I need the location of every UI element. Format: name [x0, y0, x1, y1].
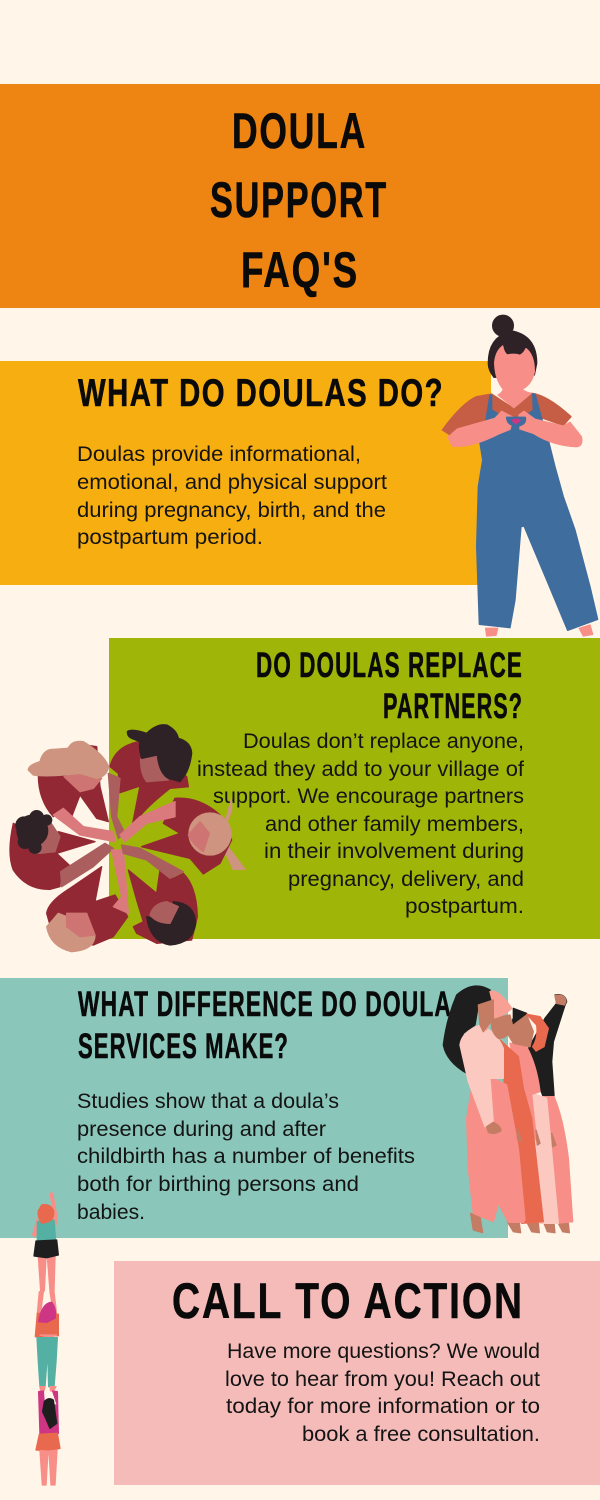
text block: what difference do doula services make: childbirth has a number of benefits — [77, 1145, 415, 1168]
text block: do doulas replace partners: instead they add to your village of — [197, 758, 524, 781]
text block: do doulas replace partners: and other family members, — [265, 813, 524, 836]
panel: what difference do doula services make — [0, 978, 508, 1238]
text block: do doulas replace partners: in their involvement during — [264, 840, 524, 863]
icon: woman in overalls making heart hands — [442, 315, 598, 636]
text block: do doulas replace partners: pregnancy, delivery, and — [288, 868, 524, 891]
text block: do doulas replace partners: Doulas don’t replace anyone, — [243, 730, 524, 753]
text block: what difference do doula services make: presence during and after — [77, 1118, 326, 1141]
title — [210, 103, 388, 298]
heading: what difference do doula services make — [78, 985, 452, 1066]
text block: what difference do doula services make — [77, 1090, 415, 1224]
heading: what difference do doula services make: SERVICES MAKE? — [78, 1027, 289, 1066]
title: FAQ'S — [241, 242, 359, 298]
text block: what do doulas do: Doulas provide informational, — [77, 443, 361, 466]
text block: do doulas replace partners: postpartum. — [405, 895, 524, 918]
text block: what do doulas do: postpartum period. — [77, 526, 263, 549]
panel: do doulas replace partners — [109, 638, 600, 939]
text block: what do doulas do: during pregnancy, birth, and the — [77, 499, 386, 522]
text block: what do doulas do: emotional, and physical support — [77, 471, 387, 494]
text block: call to action: book a free consultation. — [302, 1423, 540, 1446]
hair: curly — [16, 811, 52, 853]
panel: what do doulas do — [0, 361, 491, 585]
text block: what difference do doula services make: both for birthing persons and — [77, 1173, 359, 1196]
person: lower right — [122, 845, 197, 945]
heading: do doulas replace partners — [256, 646, 523, 726]
text block: call to action — [225, 1340, 540, 1446]
text block: call to action: today for more information or to — [226, 1395, 540, 1418]
panel: call to action — [114, 1261, 600, 1485]
title banner — [0, 84, 600, 308]
title: DOULA — [232, 103, 367, 159]
text block: what difference do doula services make: babies. — [77, 1201, 145, 1224]
person: lower left — [47, 850, 128, 952]
text block: do doulas replace partners — [197, 730, 524, 918]
text block: call to action: love to hear from you! Reach out — [225, 1368, 540, 1391]
icon: circle of people joining hands — [10, 725, 245, 952]
icon: four women standing together with raised fist — [443, 986, 573, 1233]
person: left — [10, 811, 113, 889]
heading: what do doulas do: WHAT DO DOULAS DO? — [78, 372, 444, 415]
text block: do doulas replace partners: support. We encourage partners — [213, 785, 524, 808]
text block: call to action: Have more questions? We would — [227, 1340, 540, 1363]
icon: three women stacked reaching upward — [33, 1193, 60, 1485]
text block: what difference do doula services make: Studies show that a doula’s — [77, 1090, 339, 1113]
person: top — [108, 725, 192, 838]
text block: what do doulas do — [77, 443, 387, 549]
person: upper left — [28, 741, 115, 842]
title: SUPPORT — [210, 172, 388, 228]
person: right — [120, 798, 245, 874]
